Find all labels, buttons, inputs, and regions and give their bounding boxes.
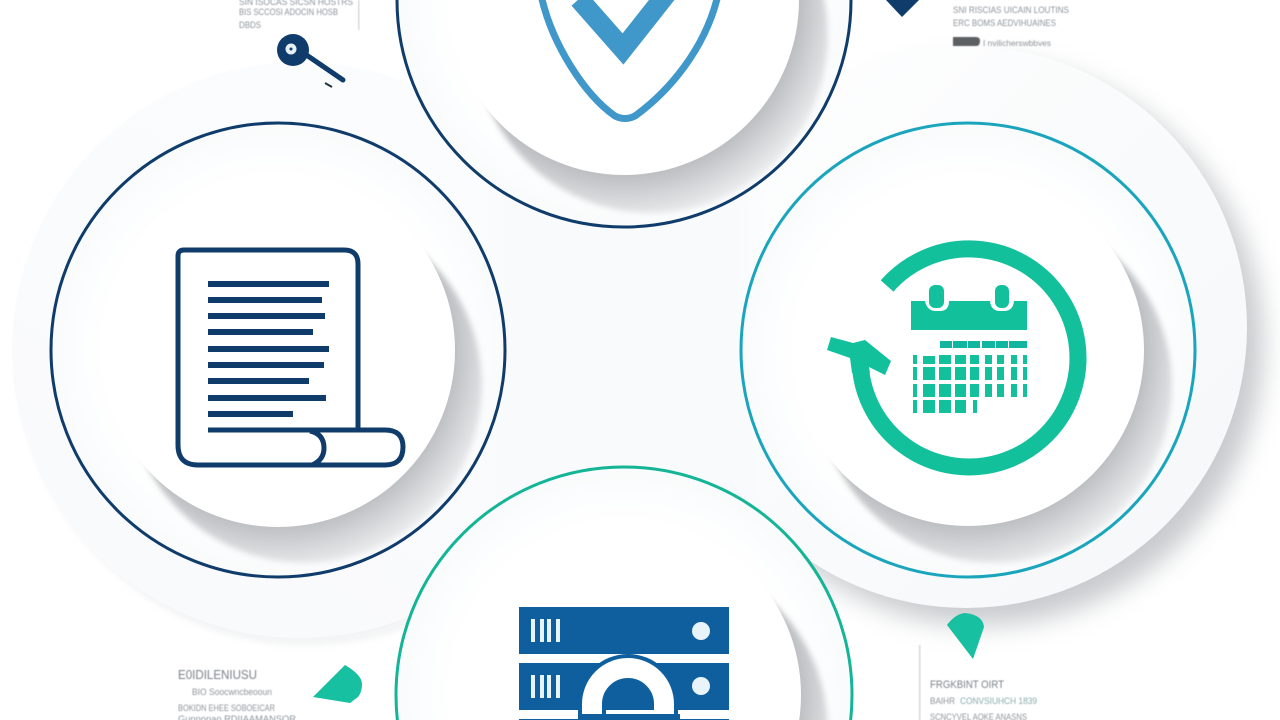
disc shadow [772, 598, 830, 720]
text block: top right [953, 5, 1069, 48]
ring interior [398, 0, 850, 226]
text block: top right: ERC BOMS AEDVIHUAINES [953, 18, 1056, 29]
divider line [919, 645, 920, 720]
text block: top left: BIS SCCOSI ADOCIN HOSB [239, 7, 338, 17]
panel: top ring [397, 0, 851, 227]
text block: bottom left: BIO Soocwncbeooun [192, 687, 272, 698]
text block: bottom right [919, 645, 1037, 720]
panel: bottom ring [396, 467, 852, 720]
icon: key [277, 34, 343, 87]
central backing glow [324, 50, 924, 650]
legend pill [953, 37, 980, 46]
text block: bottom right: CONVSIUHCH 1839 [960, 696, 1037, 707]
ring outline [397, 0, 851, 227]
calendar grid [913, 355, 917, 364]
disc shadow [832, 250, 1174, 564]
ring interior [52, 124, 504, 576]
text block: bottom left: BOKIDN EHEE SOBOEICAR [178, 703, 275, 714]
text block: bottom left: E0IDILENIUSU [178, 667, 257, 682]
ring interior [398, 469, 850, 720]
text block: top left: DBDS [239, 20, 261, 30]
white disc [101, 173, 455, 527]
outer backing shape: right [685, 46, 1263, 625]
outer backing shape: left [12, 62, 594, 646]
white disc [447, 518, 801, 720]
white disc [792, 174, 1144, 526]
text block: bottom right: BAIHR [930, 696, 955, 707]
arrow ring [860, 249, 1078, 467]
central backing fill [500, 180, 750, 520]
icon: top right marker [886, 0, 919, 17]
ring outline [396, 467, 852, 720]
ring outline [741, 123, 1195, 577]
panel: left ring [51, 123, 505, 577]
ring outline [51, 123, 505, 577]
text block: top right: SNI RISCIAS UICAIN LOUTINS [953, 5, 1069, 16]
icon: shield with check mark [541, 0, 718, 118]
calendar weekday row [940, 341, 1027, 348]
icon: bottom right teal marker [947, 613, 984, 659]
icon: document scroll [178, 250, 403, 465]
icon: calendar with cycle arrow [827, 249, 1078, 467]
ring interior [742, 124, 1194, 576]
text block: top left [239, 0, 360, 30]
text block: bottom right: FRGKBINT OIRT [930, 679, 1004, 691]
text block: top right: I nvilicherswbbves [983, 39, 1051, 48]
calendar header [911, 301, 1027, 330]
icon: server with padlock [519, 607, 729, 720]
white disc [449, 0, 799, 175]
disc shadow [474, 0, 828, 213]
disc shadow [143, 253, 484, 564]
icon: bottom left teal marker [313, 665, 362, 703]
panel: right ring [741, 123, 1195, 577]
panel edge line [358, 0, 360, 30]
text block: bottom left [178, 667, 296, 720]
